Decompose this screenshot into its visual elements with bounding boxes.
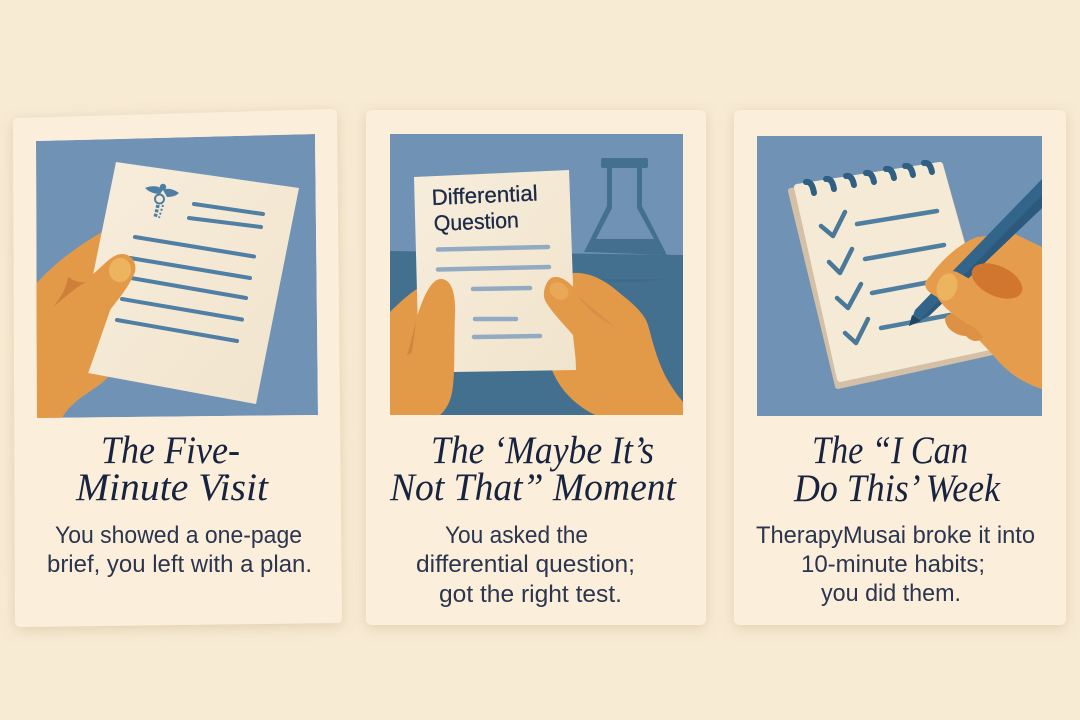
icon: caduceus — [145, 184, 179, 218]
description — [756, 522, 1035, 607]
description: differential question; — [416, 551, 635, 578]
illustration: hand ticking checklist — [757, 136, 1042, 416]
hand back — [925, 233, 1042, 389]
text lines — [117, 204, 263, 341]
icon: pen — [909, 179, 1042, 326]
description: You asked the — [445, 522, 588, 549]
description: You showed a one-page — [55, 522, 302, 549]
right thumb — [544, 277, 576, 362]
description: brief, you left with a plan. — [47, 551, 312, 578]
card 3 background — [734, 110, 1066, 625]
description: got the right test. — [439, 581, 622, 608]
paper with medical brief — [88, 162, 299, 404]
left thumb — [418, 279, 456, 415]
panel: the maybe it's not that moment — [366, 110, 706, 625]
illustration: hand holding one-page brief — [36, 134, 318, 418]
thumb — [88, 254, 136, 373]
check marks — [821, 212, 868, 343]
description: you did them. — [821, 580, 961, 607]
panel: the five-minute visit — [13, 109, 342, 627]
card 2 background — [366, 110, 706, 625]
heading: The Five- — [101, 429, 240, 472]
infographic canvas — [8, 108, 1071, 634]
description — [47, 522, 312, 578]
heading — [75, 429, 269, 509]
paper with question: Differential — [431, 180, 538, 210]
illustration: hands holding differential question — [390, 134, 683, 415]
paper with question: Question — [433, 207, 519, 236]
list lines — [857, 211, 950, 328]
fingers — [945, 313, 984, 341]
heading — [389, 429, 677, 509]
heading: Minute Visit — [75, 466, 269, 509]
heading: Not That” Moment — [389, 466, 677, 509]
thumb with nail — [925, 270, 1042, 389]
icon: flask — [584, 158, 667, 255]
card 1 background — [13, 109, 342, 627]
notepad — [791, 163, 993, 386]
heading: The “I Can — [812, 429, 968, 472]
paper with question — [414, 170, 576, 372]
description: 10-minute habits; — [801, 551, 985, 578]
panel: the i can do this week — [734, 110, 1066, 625]
description — [416, 522, 635, 608]
heading: The ‘Maybe It’s — [431, 429, 654, 472]
palm shadow — [972, 263, 1022, 299]
spiral binding — [806, 163, 932, 193]
description: TherapyMusai broke it into — [756, 522, 1035, 549]
heading — [793, 429, 1001, 510]
heading: Do This’ Week — [793, 467, 1001, 510]
